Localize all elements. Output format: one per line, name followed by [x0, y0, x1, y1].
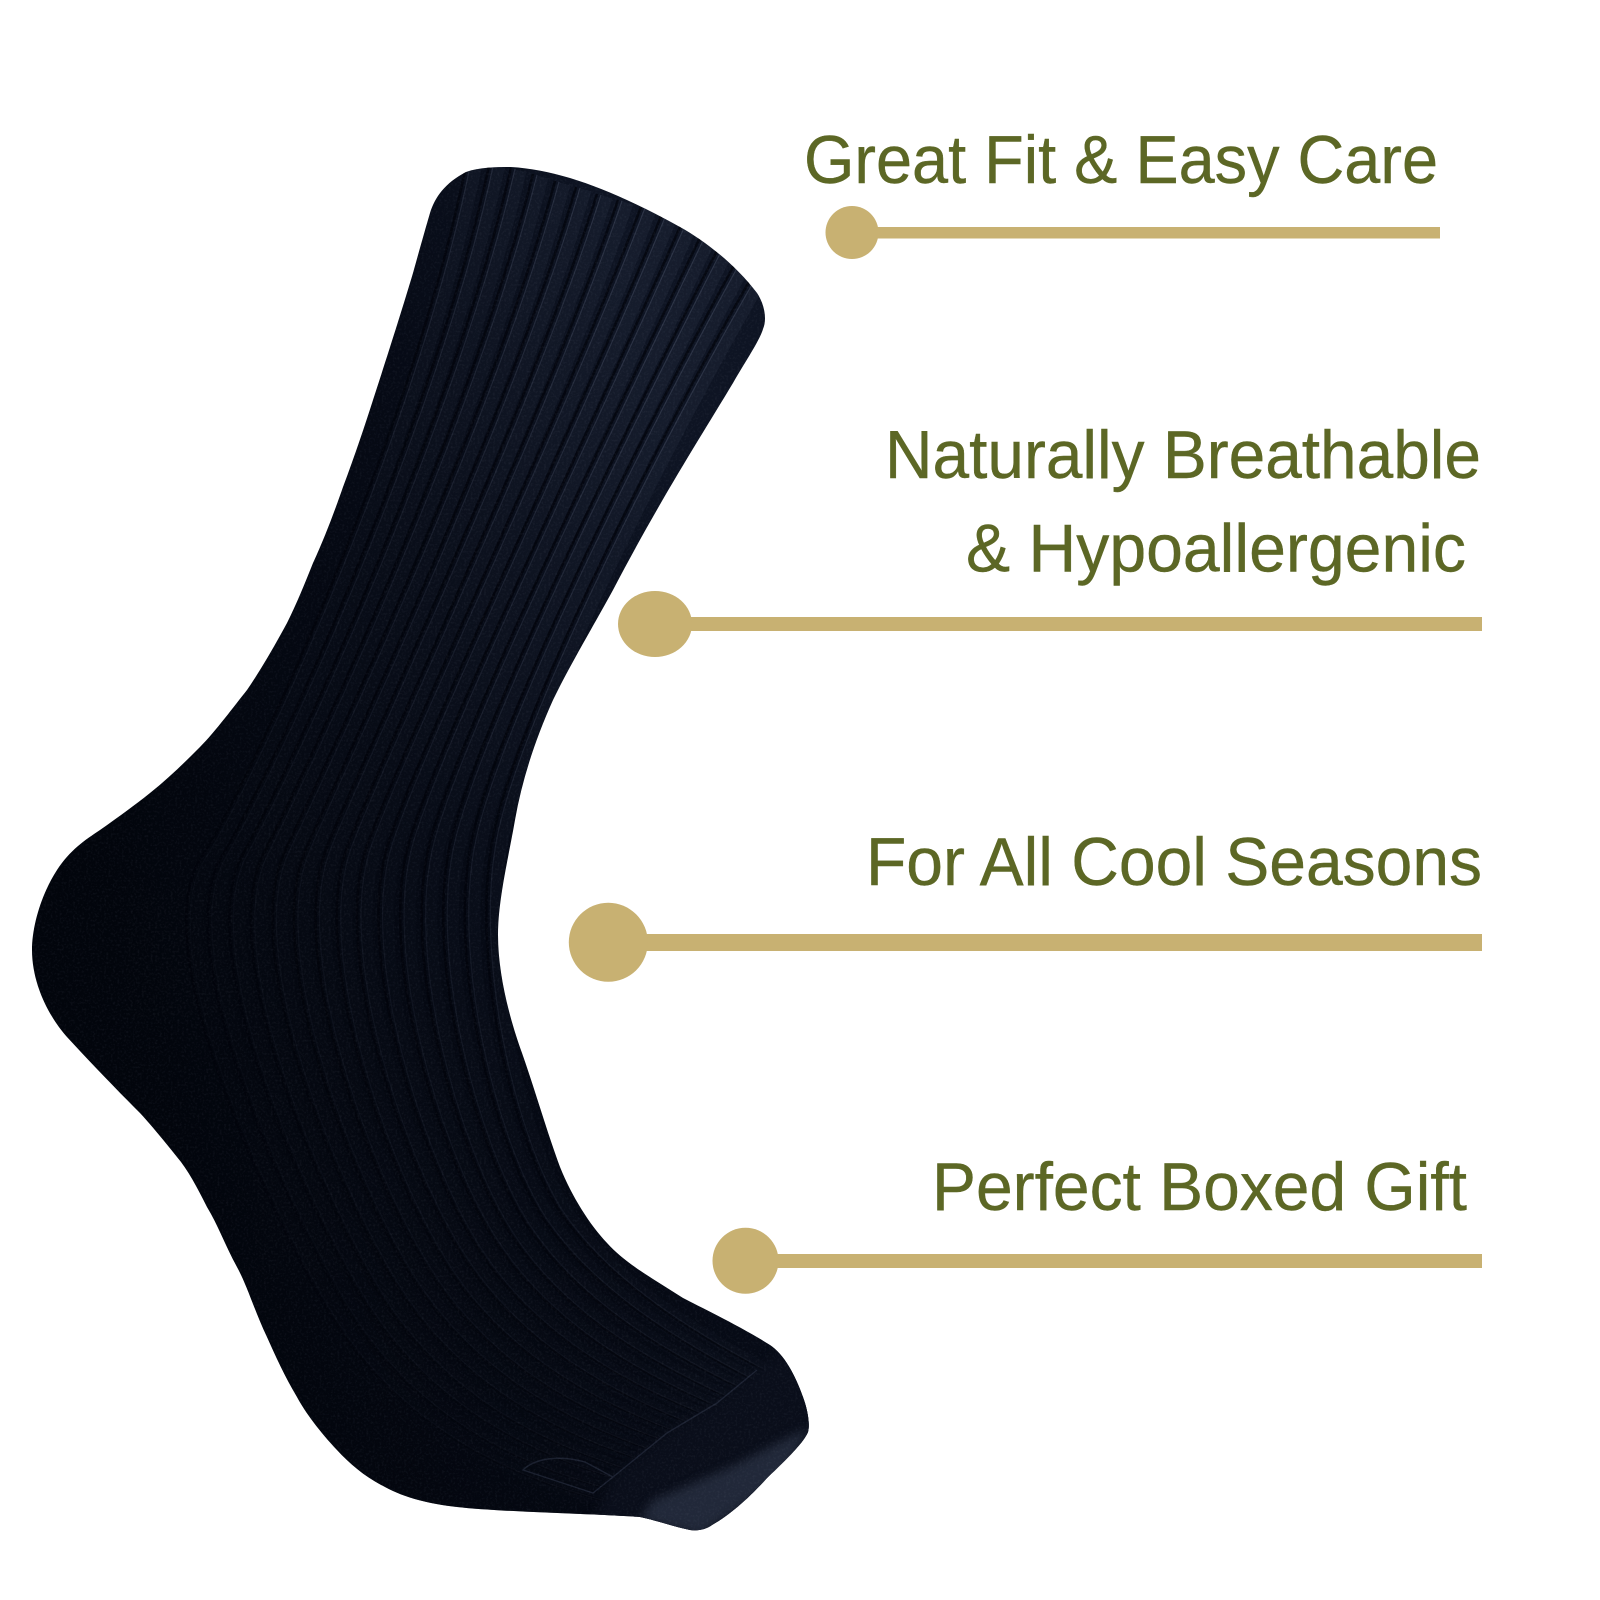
callout: perfect boxed gift [712, 1149, 1482, 1294]
callout text: Perfect Boxed Gift [932, 1149, 1467, 1225]
callout: for all cool seasons [569, 824, 1482, 982]
callout: great fit and easy care [804, 122, 1440, 259]
callout text: & Hypoallergenic [966, 510, 1466, 586]
toe cap [596, 1352, 809, 1530]
callout text: Great Fit & Easy Care [804, 122, 1438, 198]
marker dot [712, 1228, 778, 1294]
marker dot [569, 903, 648, 982]
leader line [655, 617, 1482, 631]
marker dot [826, 206, 878, 259]
toe lighter band [640, 1428, 810, 1536]
foot shading [96, 1068, 809, 1530]
callout text: For All Cool Seasons [866, 824, 1482, 900]
leader line [608, 934, 1482, 951]
callout: naturally breathable and hypoallergenic [618, 417, 1482, 657]
knit ribs: highlights [238, 167, 761, 1500]
sock body [20, 150, 820, 1540]
knit texture [20, 150, 820, 1540]
callout text [885, 417, 1481, 586]
callout text: Naturally Breathable [885, 417, 1481, 493]
marker dot [618, 591, 692, 657]
knit ribs: grooves [306, 168, 755, 1410]
leader line [745, 1254, 1482, 1268]
sock illustration [20, 150, 830, 1540]
leader line [852, 227, 1440, 238]
toe seam [523, 1370, 757, 1493]
knit ribs: raised bands [470, 167, 759, 904]
